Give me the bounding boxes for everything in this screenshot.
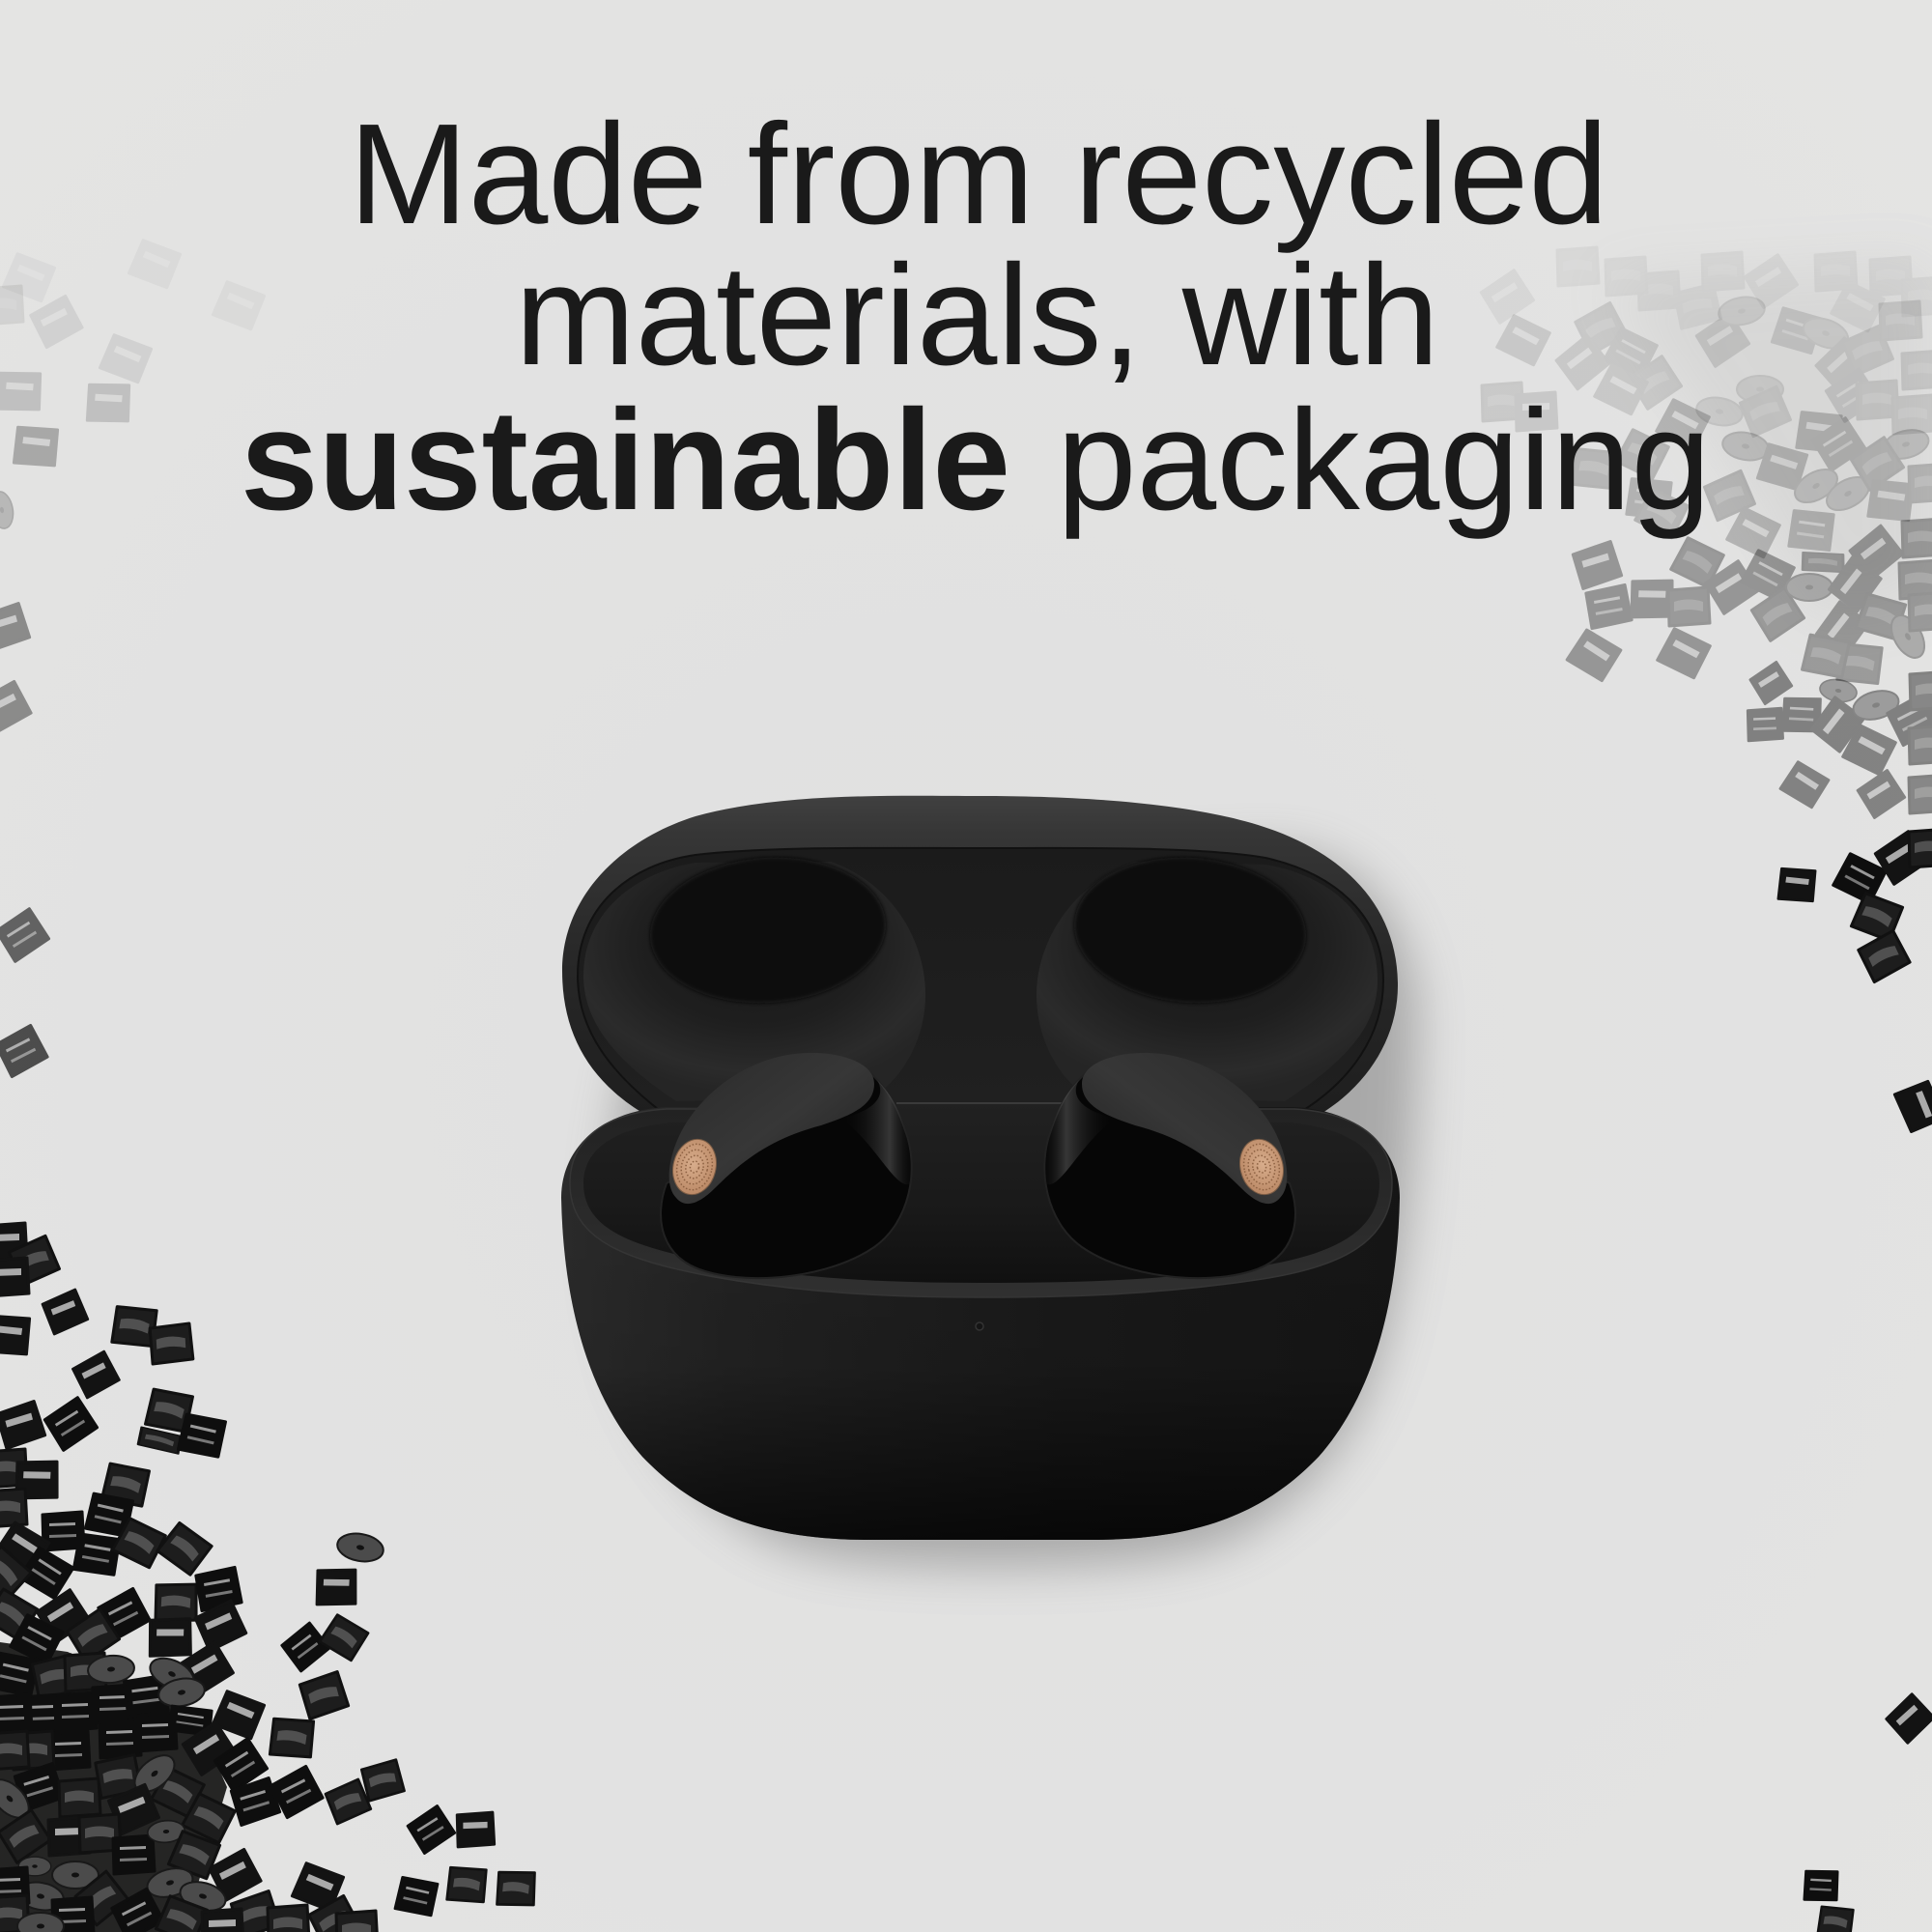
left lid recess	[583, 850, 925, 1101]
case shadow	[609, 850, 1418, 1567]
hinge panel	[889, 1103, 1072, 1277]
top right grey fade	[1604, 261, 1932, 618]
left earbud	[661, 1053, 912, 1278]
pile backing shade	[0, 1642, 242, 1932]
title: materials, with	[515, 236, 1439, 395]
pellets: bottom left dark pile	[0, 1223, 536, 1932]
title: packaging	[1057, 381, 1711, 540]
case base	[561, 1103, 1400, 1540]
right lid recess	[1037, 850, 1378, 1101]
pellets: top left faded scatter	[0, 238, 266, 1077]
right earbud	[1044, 1053, 1295, 1278]
title	[241, 95, 1711, 540]
open lid	[562, 796, 1398, 1116]
status LED	[976, 1322, 983, 1330]
title: sustainable	[241, 381, 1010, 540]
title: Made from recycled	[349, 95, 1608, 254]
product: earbuds charging case	[561, 796, 1418, 1567]
pellets: right edge dark	[1777, 829, 1932, 1932]
rim and inner well	[570, 1109, 1392, 1297]
pellets: top right faded scatter	[1480, 247, 1932, 818]
